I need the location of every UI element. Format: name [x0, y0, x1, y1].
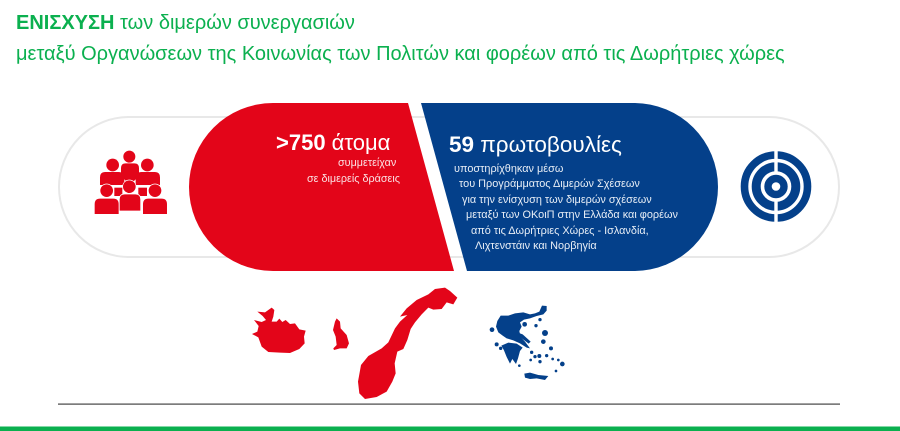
baseline rule [58, 404, 840, 405]
map: Greece [490, 306, 565, 380]
icon: group of people [95, 151, 167, 214]
caption: participants: συμμετείχαν [338, 157, 396, 169]
green footer bar [0, 426, 900, 431]
panel: red participants [189, 103, 454, 271]
title: μεταξύ Οργανώσεων της Κοινωνίας των Πολιτών και φορέων από τις Δωρήτριες χώρες [16, 43, 785, 65]
red panel shape [189, 103, 454, 271]
stat: 59 initiatives: 59 πρωτοβουλίες [449, 132, 622, 157]
description text: για την ενίσχυση των διμερών σχέσεων [462, 194, 652, 206]
caption: participants [307, 157, 400, 185]
blue panel shape [421, 103, 718, 271]
map: Liechtenstein [333, 318, 349, 350]
title [16, 12, 785, 65]
title: ΕΝΙΣΧΥΣΗ των διμερών συνεργασιών [16, 12, 355, 34]
stat: 750 people: >750 άτομα [276, 130, 391, 155]
description text: Λιχτενστάιν και Νορβηγία [475, 240, 597, 252]
map: Norway [358, 288, 457, 399]
map: Iceland [252, 308, 306, 353]
panel: blue initiatives [421, 103, 718, 271]
description text: του Προγράμματος Διμερών Σχέσεων [459, 178, 640, 190]
caption: participants: σε διμερείς δράσεις [307, 173, 400, 185]
description text: υποστηρίχθηκαν μέσω [454, 163, 564, 175]
outer outlined pill [59, 117, 839, 257]
description text: από τις Δωρήτριες Χώρες - Ισλανδία, [471, 225, 649, 237]
description text: μεταξύ των ΟΚοιΠ στην Ελλάδα και φορέων [466, 209, 678, 221]
description text [454, 163, 678, 252]
icon: concentric target [744, 150, 808, 223]
